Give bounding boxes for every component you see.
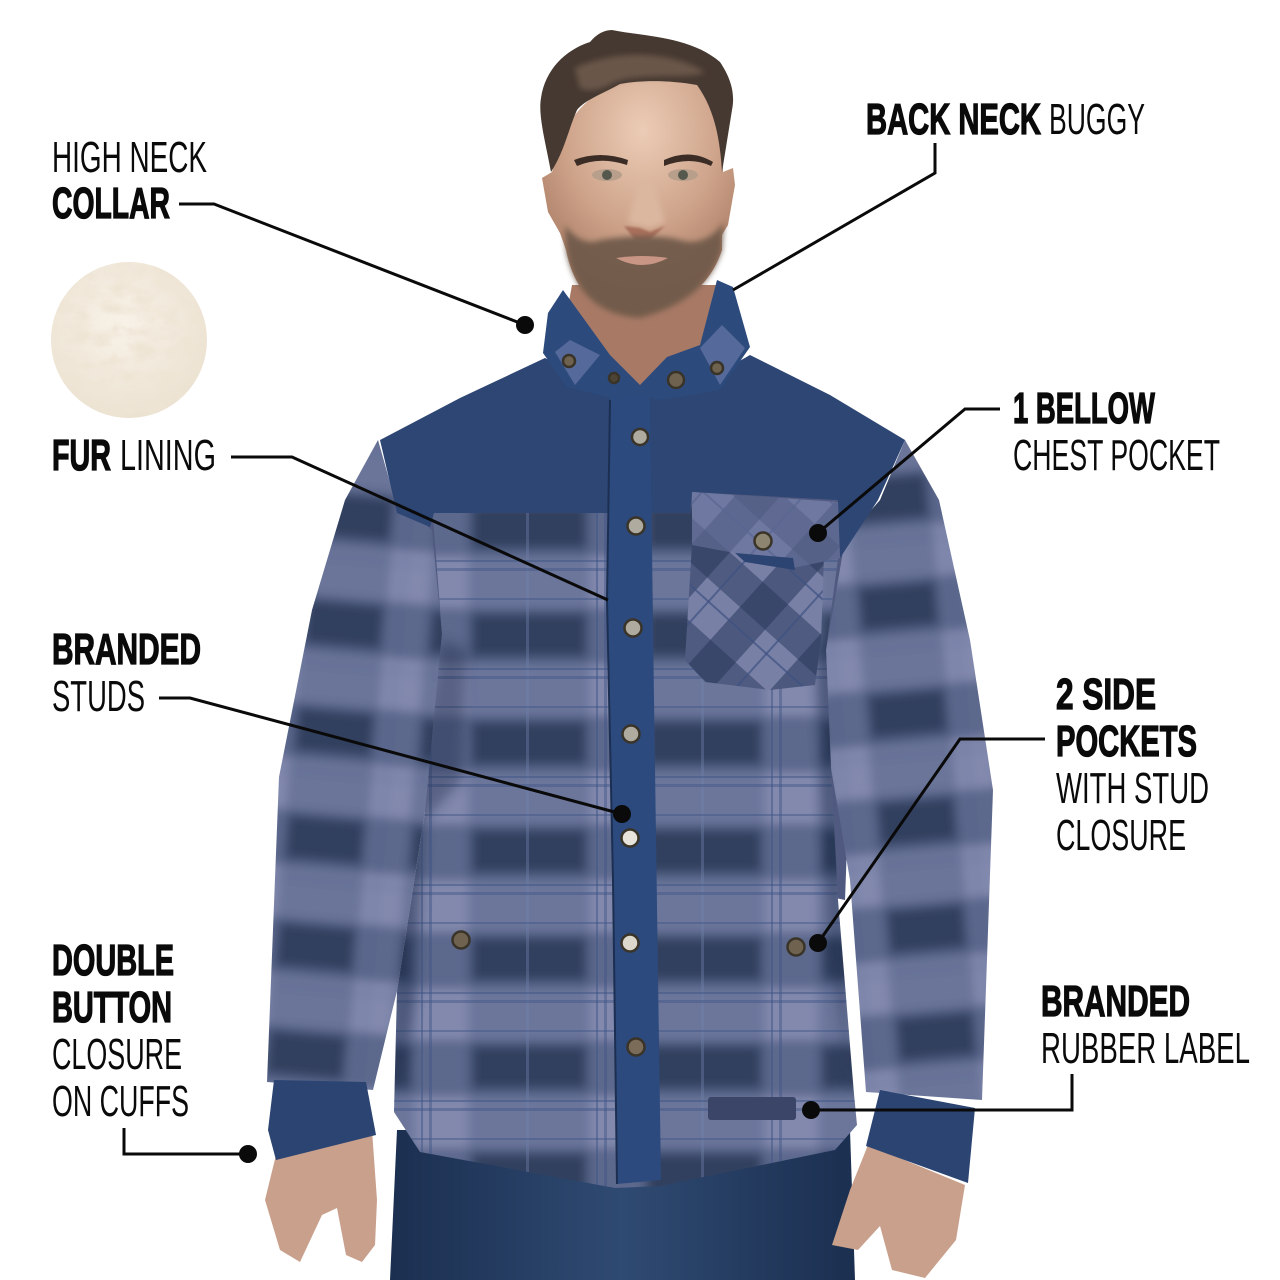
pocket flap <box>692 492 840 568</box>
man wearing plaid jacket <box>240 30 1010 1280</box>
hair <box>540 30 733 172</box>
chest pocket <box>685 545 824 690</box>
callout: bellow chest pocket: 1 BELLOW <box>1013 384 1155 433</box>
beard <box>565 222 724 318</box>
callout: double button closure on cuffs: BUTTON <box>52 983 172 1032</box>
callout: double button closure on cuffs: DOUBLE <box>52 936 174 985</box>
mouth <box>616 256 668 265</box>
side shading <box>390 640 850 1100</box>
callout: high neck collar: COLLAR <box>52 179 170 228</box>
callout: high neck collar <box>52 133 534 334</box>
callout: side pockets: CLOSURE <box>1056 811 1186 860</box>
callout: double button closure on cuffs: CLOSURE <box>52 1030 182 1079</box>
studs <box>452 355 804 1056</box>
rubber label <box>708 1097 796 1120</box>
collar <box>543 280 750 400</box>
callout: back neck buggy: BACK NECK <box>866 95 1041 144</box>
brows and eyes <box>574 154 713 166</box>
callout: double button closure on cuffs: ON CUFFS <box>52 1077 189 1126</box>
fur lining swatch <box>51 262 207 418</box>
callout: fur lining: LINING <box>120 431 216 480</box>
callout: bellow chest pocket <box>809 384 1220 542</box>
left hand <box>265 1130 377 1262</box>
head <box>542 78 735 318</box>
jacket torso <box>380 490 870 1200</box>
callout: branded studs: BRANDED <box>52 625 201 674</box>
callout: high neck collar: HIGH NECK <box>52 133 207 182</box>
callout: branded rubber label: BRANDED <box>1041 977 1190 1026</box>
callout: back neck buggy <box>733 95 1145 290</box>
callout: branded rubber label <box>802 977 1250 1119</box>
left sleeve <box>267 440 442 1090</box>
cuffs <box>268 1080 376 1160</box>
callout: side pockets: POCKETS <box>1056 717 1197 766</box>
callout: back neck buggy: BUGGY <box>1049 95 1145 144</box>
jacket backing <box>390 490 860 900</box>
right hand <box>832 1145 965 1278</box>
callout: side pockets <box>809 670 1209 952</box>
callout: fur lining: FUR <box>52 431 111 480</box>
placket <box>607 395 661 1184</box>
right sleeve <box>826 440 993 1100</box>
callout: branded studs <box>52 625 631 823</box>
callout: fur lining <box>52 431 608 600</box>
yoke <box>380 355 905 558</box>
jeans <box>390 1130 855 1280</box>
callout: double button closure on cuffs <box>52 936 257 1163</box>
nose <box>628 180 665 228</box>
callout: branded studs: STUDS <box>52 672 145 721</box>
neck <box>562 285 720 392</box>
callout: side pockets: 2 SIDE <box>1056 670 1156 719</box>
